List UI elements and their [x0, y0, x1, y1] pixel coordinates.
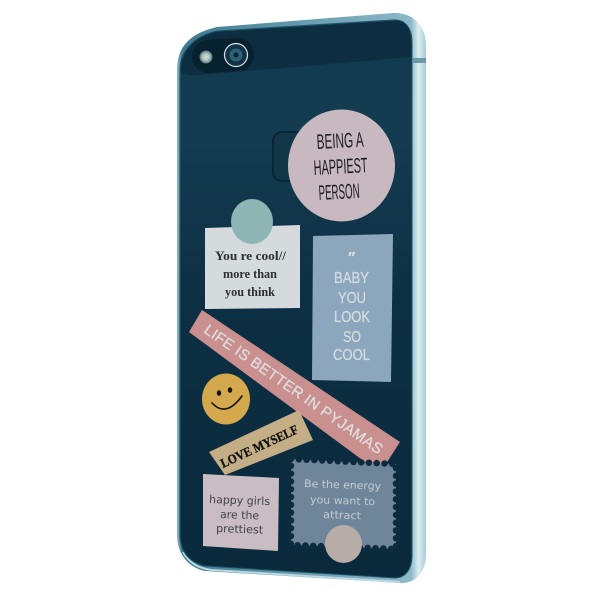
sticker: be the energy stamp: you want to — [310, 494, 375, 508]
sticker: baby you look so cool: SO — [343, 329, 361, 346]
sticker: happy girls: are the — [220, 508, 260, 522]
sticker: baby you look so cool: LOOK — [334, 309, 370, 326]
sticker: you re cool card: You re cool// — [215, 248, 286, 263]
fingerprint sensor — [273, 132, 323, 181]
sticker: baby you look so cool: BABY — [334, 270, 369, 287]
sticker: happy girls — [203, 474, 279, 551]
case bottom lip — [183, 552, 400, 582]
sticker: baby you look so cool: " — [347, 250, 355, 267]
camera lens — [224, 44, 248, 66]
sticker: love myself: LOVE MYSELF — [218, 422, 300, 471]
camera band — [181, 21, 411, 75]
phone back panel — [180, 20, 412, 578]
teal circle — [231, 199, 273, 244]
flash — [200, 50, 212, 64]
sticker: life is better in pyjamas: LIFE IS BETTER IN PYJAMAS — [201, 321, 386, 458]
camera module — [191, 37, 255, 74]
sticker: baby you look so cool — [312, 234, 393, 382]
sticker: happy girls: happy girls — [209, 493, 271, 508]
sticker: being a happiest person: BEING A — [316, 129, 364, 154]
sticker: be the energy stamp — [291, 459, 396, 563]
side button band — [413, 58, 426, 63]
sticker: happy girls: prettiest — [216, 522, 264, 537]
sticker: be the energy stamp: Be the energy — [304, 478, 381, 493]
phone case outer shell — [177, 13, 426, 583]
beige circle — [325, 525, 362, 563]
sticker: you re cool card: you think — [225, 284, 276, 299]
sticker: you re cool card: more than — [223, 266, 278, 281]
sticker: being a happiest person — [288, 110, 395, 222]
sticker: smiley — [202, 374, 250, 424]
sticker: baby you look so cool: YOU — [338, 290, 366, 307]
sticker: you re cool card — [205, 199, 300, 309]
sticker: being a happiest person: HAPPIEST — [313, 154, 368, 180]
sticker: being a happiest person: PERSON — [318, 180, 360, 205]
sticker: baby you look so cool: COOL — [333, 347, 370, 364]
sticker: be the energy stamp: attract — [323, 509, 361, 522]
